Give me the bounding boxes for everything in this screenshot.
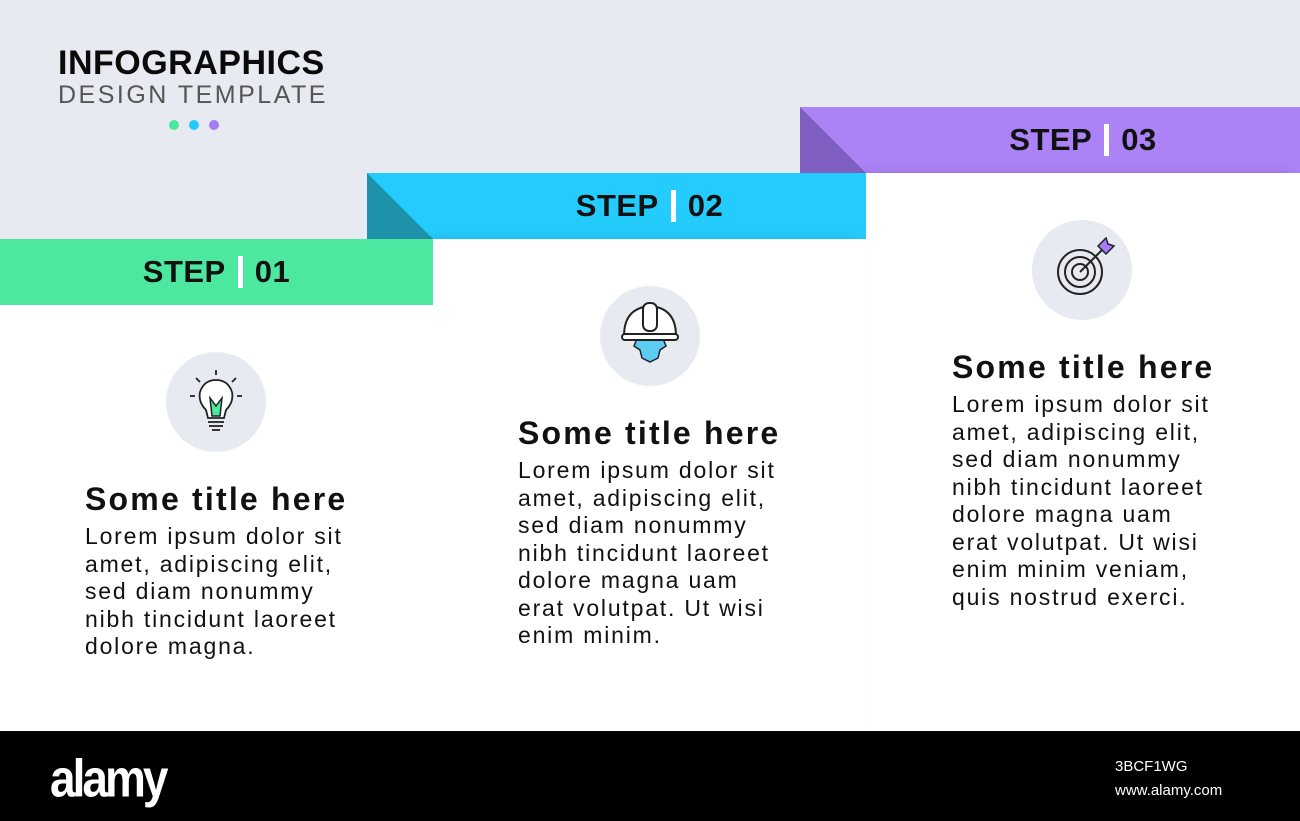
text 3: amet, adipiscing elit, (952, 418, 1200, 444)
text 3: nibh tincidunt laoreet (952, 474, 1204, 500)
header: step 01 (0, 239, 433, 305)
text 2: dolore magna uam (518, 567, 739, 593)
icon: target (1032, 220, 1132, 320)
text 2 (518, 457, 776, 648)
text 3: dolore magna uam (952, 501, 1173, 527)
text 3: sed diam nonummy (952, 446, 1182, 472)
header: step 03 (800, 107, 1300, 173)
image id: www.alamy.com (1115, 782, 1222, 799)
text 1 (85, 523, 343, 659)
header: step 02: STEP 02 (576, 188, 723, 223)
text 2: enim minim. (518, 622, 662, 648)
text 1: Lorem ipsum dolor sit (85, 523, 343, 549)
text 1: sed diam nonummy (85, 578, 314, 604)
logo: alamy (50, 748, 165, 808)
text 2: sed diam nonummy (518, 512, 748, 538)
panel: step 3 (800, 107, 1300, 731)
footer bar (0, 731, 1300, 821)
title: INFOGRAPHICS (58, 44, 325, 82)
icon: light bulb (166, 352, 266, 452)
panel: step 2 (367, 173, 866, 731)
text 1: nibh tincidunt laoreet (85, 606, 337, 632)
text 2: Lorem ipsum dolor sit (518, 457, 776, 483)
image id: 3BCF1WG (1115, 758, 1188, 775)
title 3: Some title here (952, 349, 1214, 385)
image id (1115, 758, 1222, 799)
text 2: erat volutpat. Ut wisi (518, 594, 765, 620)
text 3: quis nostrud exerci. (952, 584, 1187, 610)
title 1: Some title here (85, 481, 347, 517)
text 1: amet, adipiscing elit, (85, 550, 333, 576)
text 3: enim minim veniam, (952, 556, 1189, 582)
header: step 02 (367, 173, 866, 239)
panel: step 1 (0, 239, 433, 731)
title (58, 44, 328, 109)
text 2: amet, adipiscing elit, (518, 484, 766, 510)
icon: helmet gear (600, 286, 700, 386)
header: step 01: STEP 01 (143, 254, 290, 289)
text 3 (952, 391, 1210, 610)
title 2: Some title here (518, 415, 780, 451)
title: DESIGN TEMPLATE (58, 81, 328, 109)
text 3: Lorem ipsum dolor sit (952, 391, 1210, 417)
text 3: erat volutpat. Ut wisi (952, 528, 1199, 554)
text 2: nibh tincidunt laoreet (518, 540, 770, 566)
dots (169, 120, 219, 130)
text 1: dolore magna. (85, 633, 255, 659)
header: step 03: STEP 03 (1009, 122, 1157, 157)
